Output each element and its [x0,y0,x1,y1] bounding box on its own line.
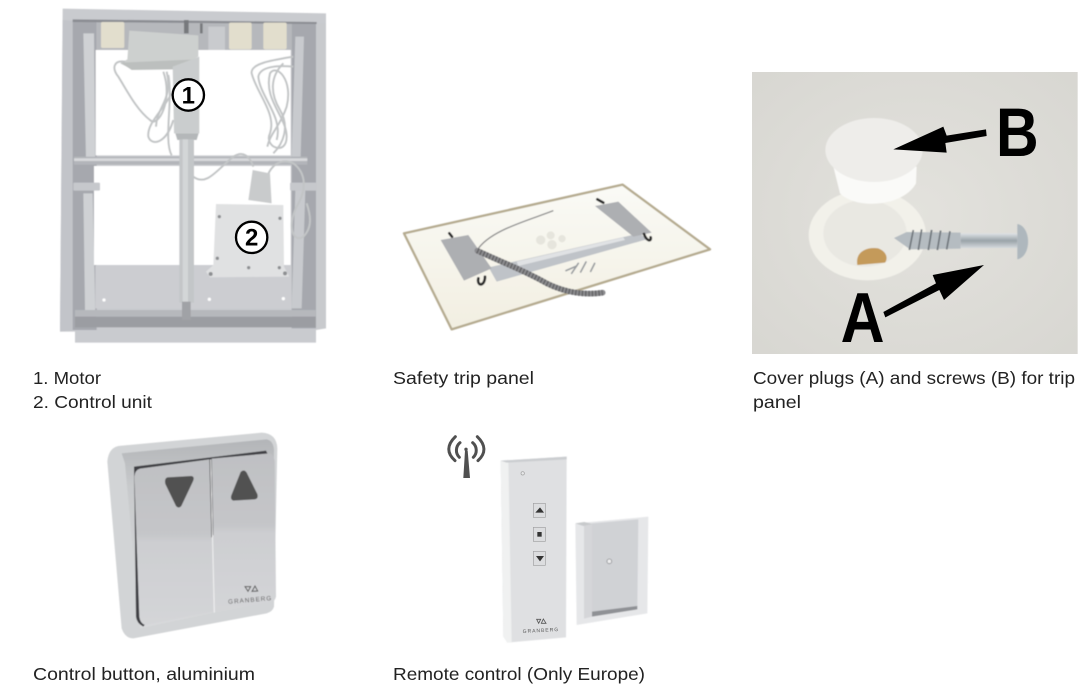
rail [489,233,647,282]
caption: cover plugs: panel [753,392,801,412]
board [404,185,710,329]
left bracket [441,235,492,281]
photo: remote control with wall holder [449,437,648,643]
outer housing [107,433,277,638]
antenna signal icon [449,437,484,478]
frame structure [60,9,326,343]
photo: safety trip panel [404,185,710,329]
caption: control button: Control button, aluminium [33,664,255,684]
caption: motor and control unit [33,368,152,412]
screw [894,232,961,249]
button down [533,551,545,565]
up arrow [231,470,258,501]
caption: motor and control unit: 2. Control unit [33,392,152,412]
brown dot [857,248,887,265]
badge 1 [173,79,204,111]
photo: motor frame with control unit [60,9,326,343]
button up [533,503,545,517]
background [752,72,1078,354]
arrow to B [893,127,987,153]
logo: GRANBERG [228,595,273,606]
badge 2: 2 [245,225,258,252]
arrow to A [883,265,984,317]
down arrow [165,476,194,508]
coiled cable [477,251,603,294]
screws [566,262,595,273]
caption: safety trip panel: Safety trip panel [393,368,534,388]
wire [477,211,553,250]
letter A: A [841,278,885,357]
dark gap [134,451,271,627]
cap [833,167,917,204]
socket ring [809,190,926,280]
logo: GRANBERG [523,627,559,635]
caption: cover plugs [753,368,1075,412]
badge 2 [236,222,267,253]
logo [228,586,273,606]
photo: cover plugs and screws [752,72,1078,357]
right bracket [595,202,652,237]
left rocker [134,459,213,625]
led [521,472,524,475]
right rocker [212,453,276,613]
remote body [501,457,567,643]
button stop [533,527,545,541]
caption: cover plugs: Cover plugs (A) and screws (B) for trip [753,368,1075,388]
wall holder [575,517,648,625]
caption: motor and control unit: 1. Motor [33,368,101,388]
letter B: B [996,94,1039,171]
logo [523,619,559,635]
photo: control button [107,433,277,638]
badge 1: 1 [182,82,195,109]
caption: remote control: Remote control (Only Europe) [393,664,645,684]
plugs [536,231,566,249]
hooks [449,199,651,284]
